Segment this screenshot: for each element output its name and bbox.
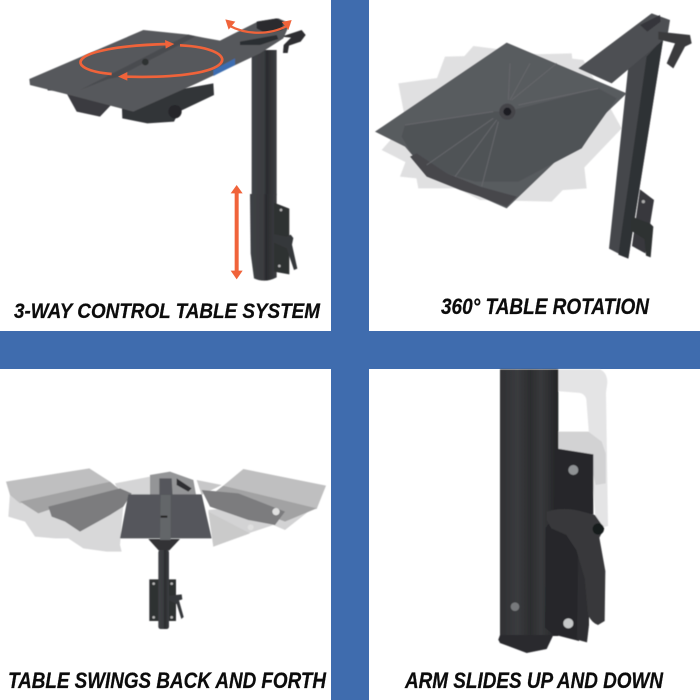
product photo: swinging table — [6, 468, 326, 629]
arrow: slide up and down — [231, 185, 243, 279]
heading: TABLE SWINGS BACK AND FORTH — [8, 668, 327, 693]
vertical blue divider — [331, 0, 369, 700]
heading: 3-WAY CONTROL TABLE SYSTEM — [14, 299, 321, 323]
heading: ARM SLIDES UP AND DOWN — [404, 668, 664, 693]
product photo: rotating table — [375, 13, 692, 259]
panel: 360 table rotation — [375, 13, 692, 319]
panel: arm slides up and down — [404, 369, 664, 693]
panel: 3-way control table system — [14, 18, 321, 323]
panel: table swings back and forth — [6, 468, 327, 693]
arrow: swing — [225, 19, 292, 33]
horizontal blue divider — [0, 331, 700, 369]
heading: 360° TABLE ROTATION — [441, 294, 650, 319]
product photo: arm close-up — [498, 369, 608, 653]
arrow: table rotation circle — [80, 40, 222, 81]
product photo: table on arm — [29, 18, 306, 281]
